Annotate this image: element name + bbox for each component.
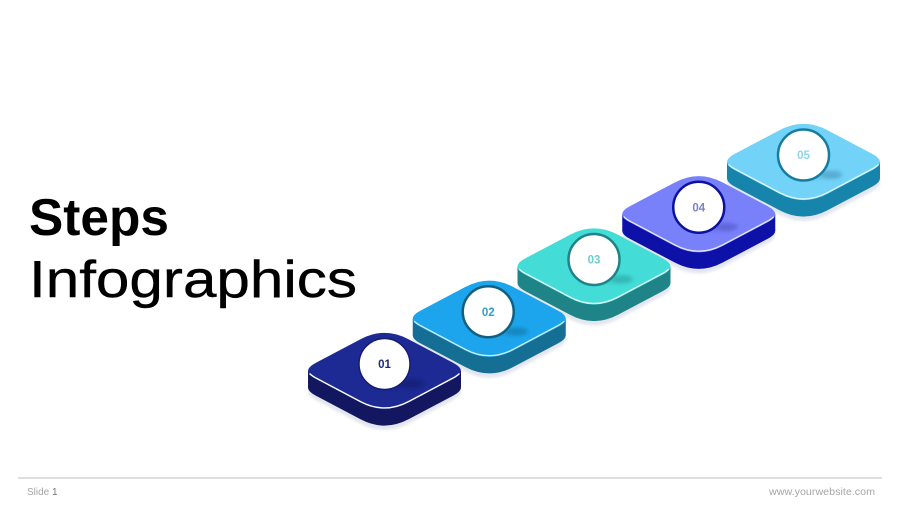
step 2 badge — [463, 286, 514, 337]
step 4 badge — [673, 182, 724, 233]
step 3 badge: 03 — [588, 254, 600, 266]
step 1 tile — [308, 333, 461, 430]
title: Infographics — [29, 251, 357, 309]
title: Steps — [29, 189, 169, 247]
step 1 badge: 01 — [378, 359, 391, 371]
step 1 badge — [359, 338, 410, 390]
slide number: Slide 1 — [27, 487, 58, 498]
title — [29, 189, 357, 309]
step 3 tile — [518, 228, 670, 326]
step 4 badge: 04 — [692, 202, 706, 214]
step 4 tile — [622, 176, 775, 273]
step 3 badge — [568, 234, 620, 285]
website url: www.yourwebsite.com — [768, 487, 875, 498]
step 5 badge: 05 — [797, 150, 810, 162]
step 5 tile — [727, 124, 880, 221]
step 5 badge — [778, 130, 829, 180]
step 2 tile — [413, 281, 566, 378]
step 2 badge: 02 — [482, 307, 495, 319]
